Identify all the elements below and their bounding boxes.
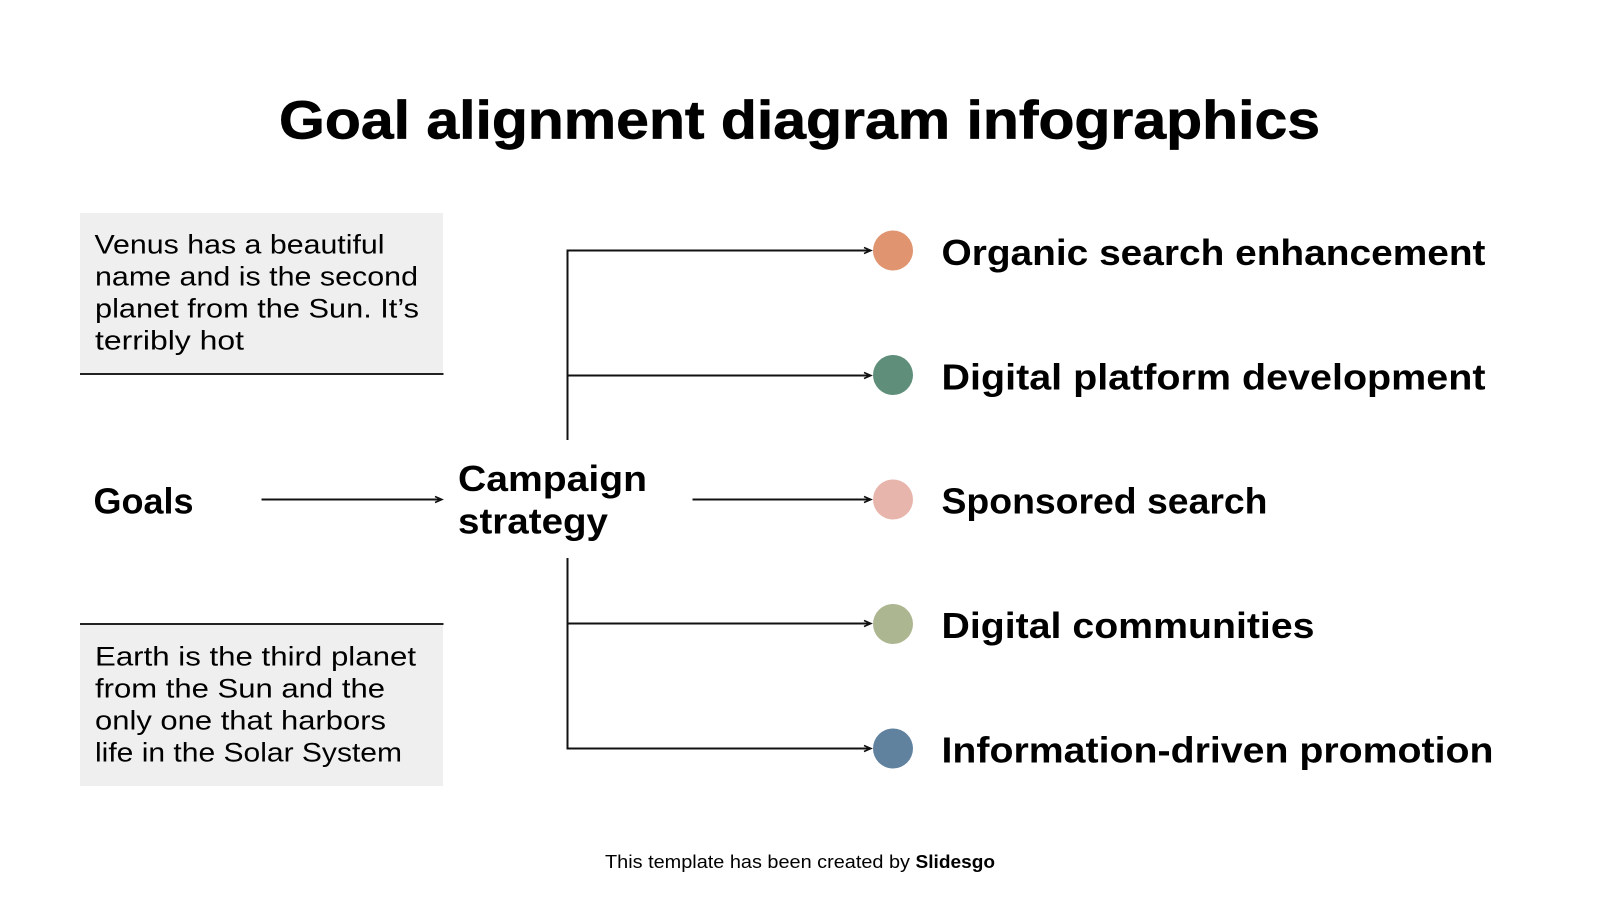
icon: sage dot [873,604,913,644]
text: Venus description: terribly hot [95,326,245,356]
text: Earth description: only one that harbors [95,706,386,736]
text: Venus description: Venus has a beautiful [94,230,384,260]
item: Sponsored search: Sponsored search [942,480,1268,522]
item: Digital communities: Digital communities [942,605,1314,646]
icon: pink dot [873,480,913,520]
icon: orange dot [873,230,913,270]
footer credit: This template has been created by [605,852,910,872]
panel: Earth note [80,624,444,786]
arrow: Campaign strategy to Sponsored search [692,496,871,502]
text: Earth description: life in the Solar System [95,738,402,768]
item: Digital platform development: Digital platform development [942,356,1486,398]
text: Venus description: name and is the second [95,262,418,292]
title: Goal alignment diagram infographics [279,90,1320,150]
label: Goals: Goals [94,480,194,522]
label: Campaign strategy: Campaign [458,458,647,499]
text: Earth description: Earth is the third planet [95,642,417,672]
icon: green dot [873,355,913,395]
item: Organic search enhancement: Organic search enhancement [942,232,1486,273]
arrow: Goals to Campaign strategy [262,496,442,502]
connector: lower branches [568,558,871,752]
label: Campaign strategy [458,458,647,542]
icon: blue dot [873,728,913,768]
footer credit: Slidesgo [916,852,995,872]
label: Campaign strategy: strategy [458,500,608,542]
text: Earth description: from the Sun and the [95,674,385,704]
item: Information-driven promotion: Information-driven promotion [942,730,1494,770]
panel: Venus note [80,213,444,374]
text: Venus description: planet from the Sun. It’s [95,294,419,324]
text: Earth description [95,642,417,768]
text: Venus description [94,230,419,356]
connector: upper branches [568,248,871,440]
